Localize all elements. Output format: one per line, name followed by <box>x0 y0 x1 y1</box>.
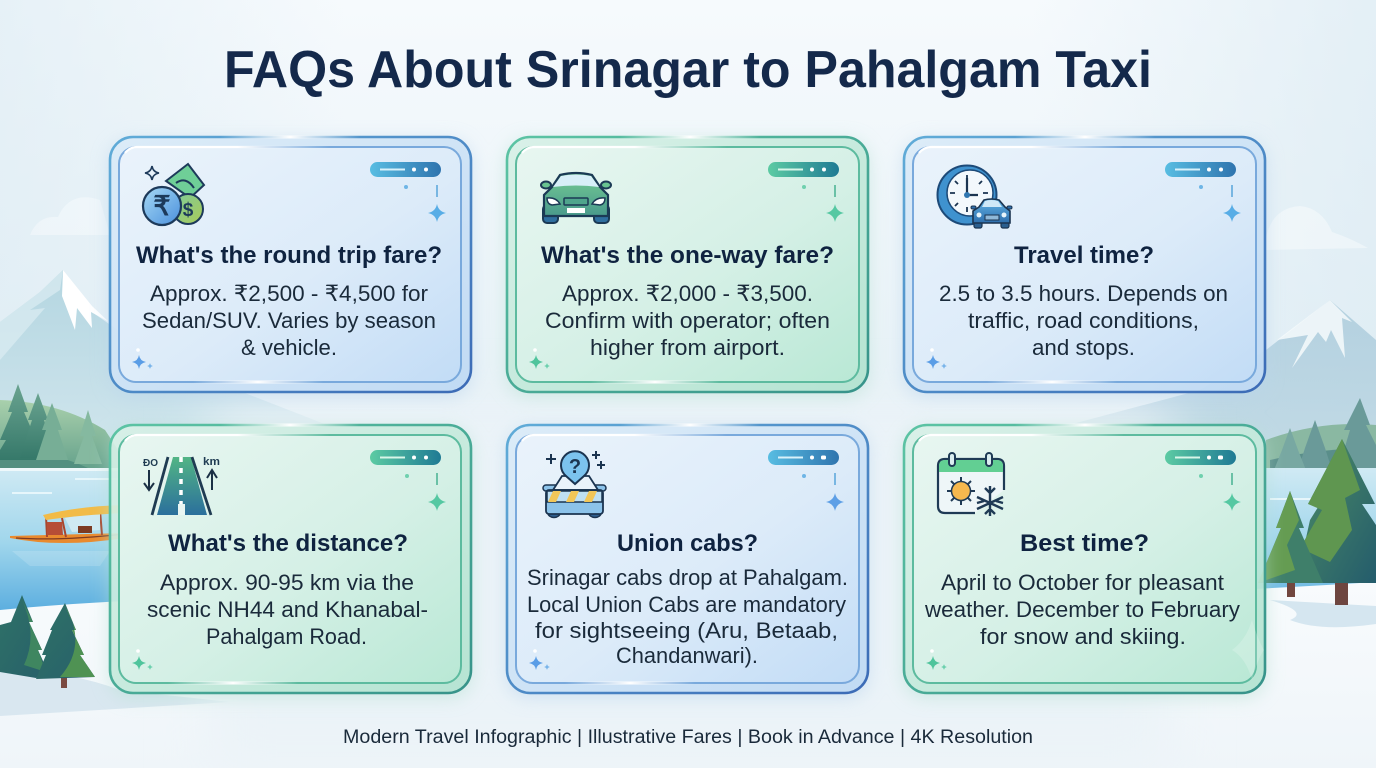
panel: travel time <box>904 136 1265 392</box>
boat <box>10 505 125 566</box>
hills right <box>1266 424 1376 468</box>
sparkle <box>132 649 153 670</box>
body text: April to October for pleasant <box>941 570 1225 595</box>
centre fade <box>201 396 1187 703</box>
panel: one-way fare <box>507 136 868 392</box>
icon: rupee and dollar coins: ₹ <box>153 191 171 221</box>
heading: What's the one-way fare? <box>541 242 834 269</box>
distant trees left <box>0 384 36 460</box>
body text: traffic, road conditions, <box>968 308 1199 333</box>
body text: Local Union Cabs are mandatory <box>527 592 847 617</box>
top right decoration <box>370 162 446 222</box>
body text <box>939 281 1228 360</box>
cloud right <box>1266 206 1368 250</box>
body text: higher from airport. <box>590 335 785 360</box>
body text: Approx. 90-95 km via the <box>160 570 414 595</box>
icon: clock with car <box>938 166 1012 228</box>
panel: union cabs <box>507 424 868 693</box>
icon: calendar with sun and snowflake <box>938 453 1004 516</box>
heading: What's the round trip fare? <box>136 242 442 269</box>
icon: union cab with question pin <box>543 451 606 518</box>
body text: Pahalgam Road. <box>206 624 367 649</box>
sparkle <box>132 348 153 369</box>
heading: Best time? <box>1020 530 1149 557</box>
body text: and stops. <box>1032 335 1135 360</box>
body text: weather. December to February <box>924 597 1241 622</box>
body text <box>142 281 436 360</box>
pine trees lower right <box>1258 439 1376 605</box>
snow banks <box>0 582 1376 768</box>
icon: road with distance markers: ÐO <box>143 458 158 469</box>
panel: best time <box>904 424 1265 693</box>
top right decoration <box>370 450 446 511</box>
top right decoration <box>768 450 844 511</box>
body text: Approx. ₹2,000 - ₹3,500. <box>562 281 813 306</box>
body text: Confirm with operator; often <box>545 308 830 333</box>
sparkle <box>529 649 550 670</box>
body text <box>527 565 848 668</box>
body text: for sightseeing (Aru, Betaab, <box>535 618 838 643</box>
panel: distance <box>110 424 471 693</box>
top right decoration <box>768 162 844 222</box>
heading: Travel time? <box>1014 242 1154 269</box>
icon: rupee and dollar coins: $ <box>183 200 194 221</box>
icon: road with distance markers: km <box>203 456 220 468</box>
card glows <box>109 140 1266 698</box>
mountain left <box>0 270 309 438</box>
body text <box>924 570 1241 649</box>
pine trees lower left <box>0 595 95 688</box>
body text: Approx. ₹2,500 - ₹4,500 for <box>150 281 428 306</box>
body text: Chandanwari). <box>616 643 758 668</box>
body text: for snow and skiing. <box>980 624 1186 649</box>
icon: car front <box>541 173 611 223</box>
body text: scenic NH44 and Khanabal- <box>147 597 428 622</box>
body text: & vehicle. <box>241 335 337 360</box>
icon: rupee and dollar coins <box>143 164 204 225</box>
hills left <box>0 400 114 468</box>
heading: What's the distance? <box>168 530 408 557</box>
icon: road with distance markers <box>143 456 220 515</box>
title: FAQs About Srinagar to Pahalgam Taxi <box>224 41 1152 99</box>
body text: Sedan/SUV. Varies by season <box>142 308 436 333</box>
lake <box>0 468 1376 618</box>
sparkle <box>529 348 550 369</box>
heading: Union cabs? <box>617 530 758 557</box>
body text: Srinagar cabs drop at Pahalgam. <box>527 565 848 590</box>
sparkle <box>926 649 947 670</box>
sparkle <box>926 348 947 369</box>
panel: round trip fare <box>110 136 471 392</box>
distant trees right <box>1344 398 1376 468</box>
body text <box>545 281 830 360</box>
cloud left <box>30 198 100 235</box>
body text: 2.5 to 3.5 hours. Depends on <box>939 281 1228 306</box>
top right decoration <box>1165 450 1241 511</box>
footer: Modern Travel Infographic | Illustrative Fares | Book in Advance | 4K Resolution <box>343 727 1033 748</box>
mountain right <box>1078 300 1376 444</box>
top right decoration <box>1165 162 1241 222</box>
body text <box>147 570 428 649</box>
icon: union cab with question pin: ? <box>569 456 581 478</box>
